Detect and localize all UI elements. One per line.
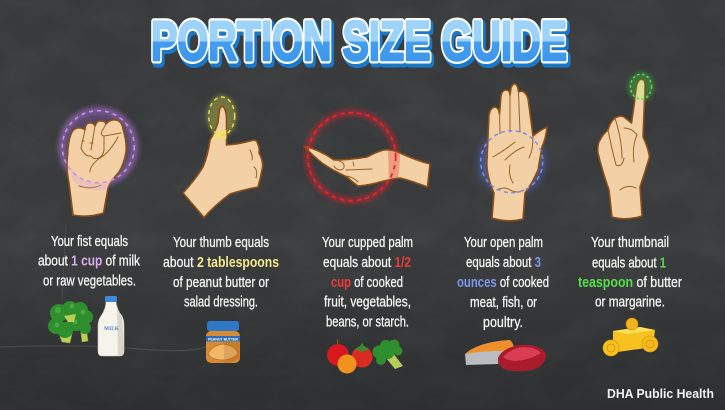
panel: thumb xyxy=(163,95,279,363)
icon: thumbs-up hand xyxy=(183,95,263,218)
title: PORTION SIZE GUIDE xyxy=(151,9,567,72)
fist caption: or raw vegetables. xyxy=(43,272,136,290)
icon: open palm hand xyxy=(479,84,547,221)
thumb caption: Your thumb equals xyxy=(173,234,269,251)
thumb caption xyxy=(163,234,279,310)
icon: milk bottle: MILK xyxy=(104,326,120,332)
cupped palm caption: equals about 1/2 xyxy=(323,254,411,271)
cupped palm caption: Your cupped palm xyxy=(322,234,413,251)
icon: cupped hand xyxy=(304,113,430,201)
thumbnail caption: or margarine. xyxy=(595,294,665,310)
fist caption: about 1 cup of milk xyxy=(38,252,140,270)
open palm caption: ounces of cooked xyxy=(457,274,549,291)
panel: cupped palm xyxy=(304,113,430,373)
cupped palm caption xyxy=(322,234,413,330)
title: PORTION SIZE GUIDE xyxy=(153,12,569,75)
panel: thumbnail xyxy=(578,72,682,356)
credit: DHA Public Health: DHA Public Health xyxy=(607,386,714,401)
cupped palm caption: beans, or starch. xyxy=(326,314,409,330)
open palm caption xyxy=(457,234,549,331)
icon: fist hand xyxy=(61,110,135,216)
icon: broccoli xyxy=(48,301,93,343)
open palm caption: poultry. xyxy=(483,314,523,331)
icon: fruit and vegetables xyxy=(327,339,403,374)
thumb caption: about 2 tablespoons xyxy=(163,254,279,271)
title: PORTION SIZE GUIDE xyxy=(151,9,567,72)
panel: fist xyxy=(38,110,140,356)
thumbnail caption xyxy=(578,234,682,310)
thumb caption: of peanut butter or xyxy=(173,274,269,291)
fist caption xyxy=(38,233,140,290)
cupped palm caption: fruit, vegetables, xyxy=(324,294,411,310)
icon: butter xyxy=(603,318,658,356)
fist caption: Your fist equals xyxy=(51,233,128,250)
icon: milk bottle xyxy=(98,296,124,356)
open palm caption: meat, fish, or xyxy=(470,294,537,311)
icon: pointing finger hand xyxy=(598,72,654,219)
thumbnail caption: Your thumbnail xyxy=(591,234,669,251)
open palm caption: Your open palm xyxy=(464,234,543,251)
icon: peanut butter jar: PEANUT BUTTER xyxy=(208,336,238,342)
cupped palm caption: cup of cooked xyxy=(331,274,403,291)
open palm caption: equals about 3 xyxy=(466,254,541,271)
thumbnail caption: equals about 1 xyxy=(592,254,666,272)
icon: peanut butter jar xyxy=(206,321,240,363)
thumbnail caption: teaspoon of butter xyxy=(578,274,682,291)
thumb caption: salad dressing. xyxy=(184,294,258,310)
icon: salmon and beef xyxy=(465,340,546,371)
panel: open palm xyxy=(457,84,549,371)
